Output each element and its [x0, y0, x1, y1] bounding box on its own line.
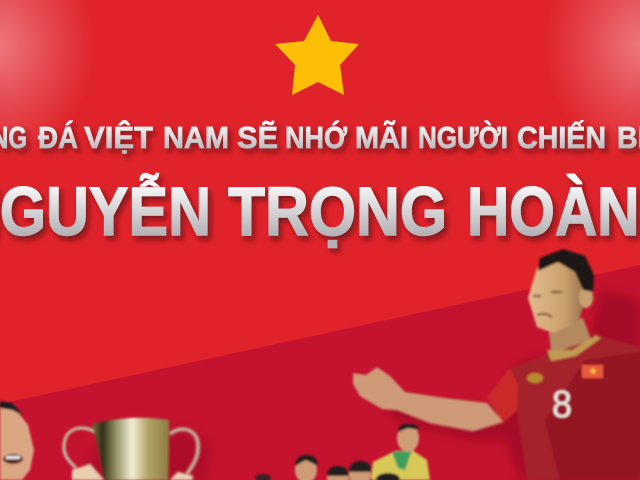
eyes and mouth [533, 292, 562, 317]
subtitle: CHIẾN [517, 120, 606, 155]
arm and hand [353, 367, 503, 431]
cup body [92, 418, 169, 480]
subtitle [0, 119, 640, 155]
shirt number: 8 [552, 384, 572, 426]
subtitle: NGƯỜI [418, 119, 508, 155]
neck [548, 318, 592, 358]
player photo: number 8 [353, 249, 640, 480]
jersey [487, 337, 640, 480]
subtitle: NHỚ [285, 119, 347, 155]
sponsor logo [527, 373, 543, 383]
jersey shade [545, 352, 640, 480]
subtitle: VIỆT [84, 119, 153, 155]
right handle [170, 429, 198, 474]
sleeve [487, 368, 518, 423]
player shadow [360, 290, 640, 480]
flag badge [582, 365, 603, 378]
player in yellow-green shirt [371, 450, 430, 480]
subtitle: ĐÁ [38, 120, 78, 155]
icon: yellow star [275, 15, 359, 95]
trophy [64, 418, 211, 480]
heads [295, 457, 317, 480]
main title [0, 173, 640, 250]
left player face [0, 401, 34, 480]
cup shadow [76, 428, 211, 480]
hair [538, 249, 594, 292]
collar [547, 335, 601, 361]
main title: TRỌNG [228, 173, 447, 250]
subtitle: SẼ [237, 120, 278, 155]
left handle [64, 428, 95, 468]
head [528, 262, 588, 333]
celebrating team [255, 424, 430, 480]
dark diagonal panel [0, 265, 640, 480]
subtitle: NAM [163, 120, 229, 155]
hands [72, 464, 104, 480]
ear [579, 286, 593, 308]
subtitle: MÃI [355, 120, 408, 155]
star on flag [589, 367, 597, 374]
